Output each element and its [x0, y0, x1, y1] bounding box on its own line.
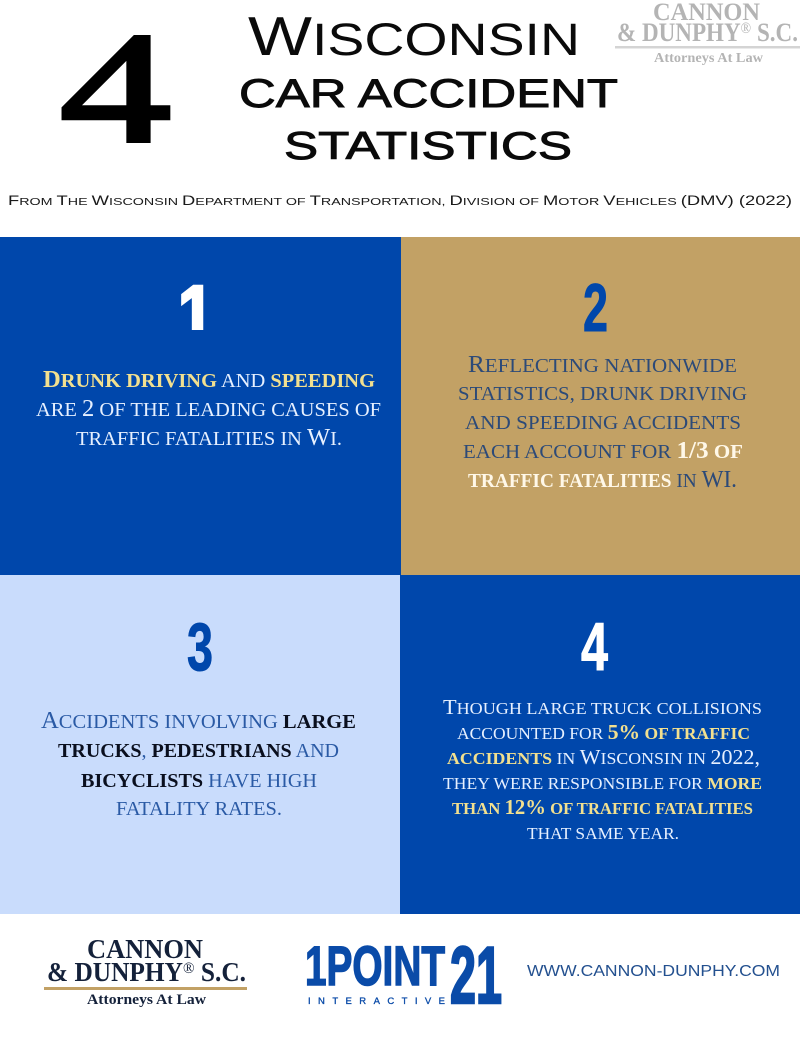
- panel 4 text: THEY WERE RESPONSIBLE FOR MORE: [443, 774, 762, 793]
- panel 2: one third of fatalities: [401, 237, 800, 575]
- website url: WWW.CANNON-DUNPHY.COM: [527, 963, 780, 980]
- number 3: 3: [187, 609, 213, 685]
- logo: 1Point21 Interactive: INTERACTIVE: [308, 996, 445, 1007]
- panel 4 text: THAT SAME YEAR.: [527, 824, 679, 843]
- panel 1 text: TRAFFIC FATALITIES IN WI.: [76, 425, 342, 451]
- title: STATISTICS: [284, 125, 572, 168]
- panel 4: large truck collisions: [400, 575, 800, 914]
- number 1: 1: [178, 269, 214, 357]
- panel 1 text: DRUNK DRIVING AND SPEEDING: [43, 367, 375, 393]
- logo: Cannon & Dunphy footer: [44, 934, 247, 1008]
- logo: Cannon & Dunphy header (grey): Attorneys At Law: [654, 50, 763, 65]
- panel 3 text: BICYCLISTS HAVE HIGH: [81, 770, 317, 792]
- title: W ISCONSIN: [248, 5, 580, 67]
- panel 4 text: [443, 695, 762, 843]
- logo: 1Point21 Interactive: 1POINT: [305, 934, 445, 997]
- panel 3 text: ACCIDENTS INVOLVING LARGE: [41, 708, 356, 734]
- number 2: 2: [583, 270, 608, 346]
- title: [239, 5, 618, 168]
- panel 1 text: ARE 2 OF THE LEADING CAUSES OF: [36, 396, 381, 422]
- logo: Cannon & Dunphy footer: CANNON: [87, 934, 203, 964]
- logo: 1Point21 Interactive: 21: [450, 931, 502, 1021]
- panel 2 text: STATISTICS, DRUNK DRIVING: [458, 383, 747, 405]
- subtitle: data source: F ROM T HE W ISCONSIN D EPARTMENT OF T RANSPORTATION, D IVISION OF M OTOR V EHICLES (DMV) (2022): [8, 193, 792, 208]
- logo: Cannon & Dunphy header (grey): [615, 0, 800, 65]
- panel 4 text: THOUGH LARGE TRUCK COLLISIONS: [443, 695, 762, 719]
- title: CAR ACCIDENT: [239, 72, 618, 116]
- panel 3: high fatality rates: [0, 575, 400, 914]
- logo: Cannon & Dunphy footer: Attorneys At Law: [87, 992, 207, 1008]
- panel 3 text: [41, 708, 356, 820]
- logo: Cannon & Dunphy footer: & DUNPHY® S.C.: [47, 957, 246, 987]
- panel 2 text: REFLECTING NATIONWIDE: [468, 352, 737, 378]
- panel 4 text: ACCIDENTS IN WISCONSIN IN 2022,: [447, 745, 760, 769]
- panel 4 text: THAN 12% OF TRAFFIC FATALITIES: [452, 795, 753, 819]
- logo: Cannon & Dunphy header (grey): & DUNPHY® S.C.: [617, 18, 798, 47]
- panel 4 text: ACCOUNTED FOR 5% OF TRAFFIC: [457, 720, 750, 744]
- number 4: 4: [581, 609, 608, 685]
- header: big numeral 4: 4: [60, 1, 171, 176]
- panel 2 text: [458, 352, 747, 493]
- panel 3 text: FATALITY RATES.: [116, 798, 282, 820]
- panel 2 text: TRAFFIC FATALITIES IN WI.: [468, 467, 737, 493]
- panel 1: leading causes: [0, 237, 401, 575]
- logo: 1Point21 Interactive: [305, 931, 502, 1021]
- panel 2 text: EACH ACCOUNT FOR 1/3 OF: [463, 438, 743, 464]
- panel 3 text: TRUCKS, PEDESTRIANS AND: [58, 740, 339, 762]
- panel 1 text: [36, 367, 381, 451]
- panel 2 text: AND SPEEDING ACCIDENTS: [465, 412, 741, 434]
